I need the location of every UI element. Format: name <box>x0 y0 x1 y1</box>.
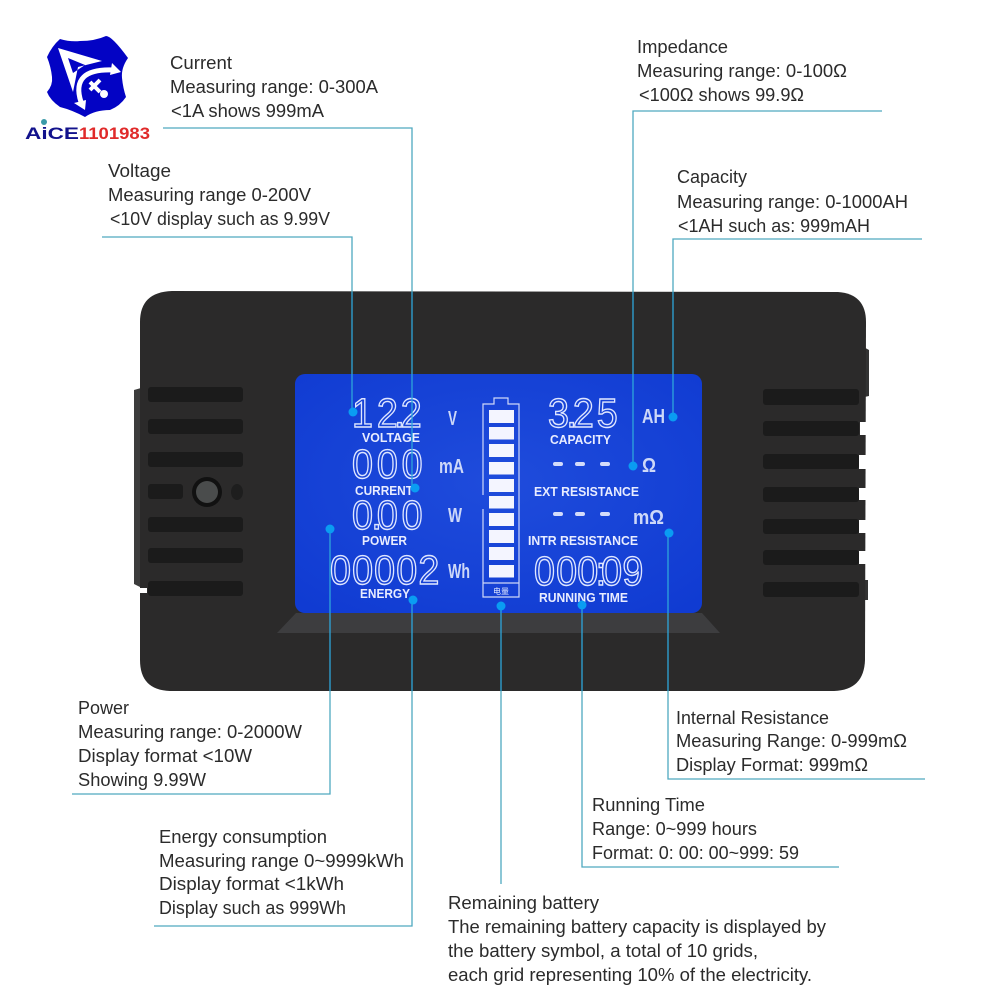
callout: power: Showing 9.99W <box>78 770 206 790</box>
current readout: 000 <box>352 442 423 487</box>
voltage readout: VOLTAGE <box>362 430 420 445</box>
energy readout: ENERGY <box>360 586 410 601</box>
callout: running time: Format: 0: 00: 00~999: 59 <box>592 843 799 863</box>
callout: capacity: Measuring range: 0-1000AH <box>677 192 908 212</box>
logo wordmark: 1101983 <box>79 124 150 143</box>
callout: power <box>72 524 334 794</box>
side clip left <box>134 388 142 588</box>
LCD screen <box>295 374 702 613</box>
callout: capacity: <1AH such as: 999mAH <box>678 216 870 236</box>
callout: internal resistance: Internal Resistance <box>676 708 829 728</box>
callout: impedance <box>628 37 882 470</box>
power readout: POWER <box>362 533 408 548</box>
voltage readout: 12.2 <box>352 391 422 436</box>
callout: internal resistance: Measuring Range: 0-999mΩ <box>676 731 907 751</box>
callout: remaining battery: The remaining battery capacity is displayed by <box>448 917 826 937</box>
callout: capacity <box>668 167 922 422</box>
callout: running time: Range: 0~999 hours <box>592 819 757 839</box>
callout: remaining battery: each grid representing 10% of the electricity. <box>448 965 812 985</box>
housing <box>140 291 866 691</box>
power readout: W <box>448 505 462 527</box>
current readout <box>352 442 464 498</box>
external resistance readout: EXT RESISTANCE <box>534 484 639 499</box>
callout: voltage: Measuring range 0-200V <box>108 185 311 205</box>
power readout: 0.00 <box>352 493 423 538</box>
callout: remaining battery: Remaining battery <box>448 893 599 913</box>
running time readout: 000:09 <box>534 549 643 594</box>
callout: capacity: Capacity <box>677 167 747 187</box>
callout: current: Current <box>170 53 232 73</box>
current readout: mA <box>439 456 464 478</box>
callout: voltage: <10V display such as 9.99V <box>110 209 330 229</box>
callout: impedance: Impedance <box>637 37 728 57</box>
left vents <box>148 387 243 596</box>
callout: energy consumption: Display such as 999Wh <box>159 898 346 918</box>
logo <box>25 36 150 143</box>
battery gauge <box>483 398 519 597</box>
energy readout <box>330 548 470 601</box>
internal resistance readout <box>528 507 664 548</box>
logo wordmark <box>25 119 150 143</box>
callout: impedance: Measuring range: 0-100Ω <box>637 61 847 81</box>
internal resistance readout: mΩ <box>633 507 664 529</box>
energy readout: 00002 <box>330 548 439 593</box>
callout: energy consumption: Display format <1kWh <box>159 874 344 894</box>
current readout: CURRENT <box>355 483 413 498</box>
power readout <box>352 493 462 548</box>
device body <box>134 291 869 691</box>
battery gauge: 电量 <box>493 586 509 596</box>
callout: internal resistance: Display Format: 999mΩ <box>676 755 868 775</box>
capacity readout: CAPACITY <box>550 432 611 447</box>
capacity readout <box>548 391 665 447</box>
callout: running time <box>578 600 839 867</box>
callout: impedance: <100Ω shows 99.9Ω <box>639 85 804 105</box>
capacity readout: 3.25 <box>548 391 618 436</box>
callout: power: Power <box>78 698 129 718</box>
callout: remaining battery: the battery symbol, a total of 10 grids, <box>448 941 758 961</box>
callout: power: Display format <10W <box>78 746 252 766</box>
callout: voltage: Voltage <box>108 161 171 181</box>
callout: running time: Running Time <box>592 795 705 815</box>
side clip right <box>860 345 869 600</box>
callout: energy consumption: Energy consumption <box>159 827 327 847</box>
callout: remaining battery <box>448 602 826 985</box>
capacity readout: AH <box>642 406 665 428</box>
internal resistance readout: INTR RESISTANCE <box>528 533 638 548</box>
icon: blue shield <box>47 36 128 117</box>
running time readout: RUNNING TIME <box>539 590 628 605</box>
button <box>192 477 243 507</box>
lower bezel <box>277 613 720 633</box>
callout: energy consumption <box>154 596 418 926</box>
callout: current: <1A shows 999mA <box>171 101 324 121</box>
logo wordmark: AiCE <box>25 124 79 143</box>
external resistance readout: Ω <box>642 455 656 477</box>
callout: current: Measuring range: 0-300A <box>170 77 378 97</box>
side notches <box>140 422 868 593</box>
external resistance readout <box>534 455 656 499</box>
callout: voltage <box>102 161 358 416</box>
right vents <box>763 389 859 597</box>
energy readout: Wh <box>448 561 470 583</box>
callout: power: Measuring range: 0-2000W <box>78 722 302 742</box>
callout: current <box>163 53 420 492</box>
callout: energy consumption: Measuring range 0~9999kWh <box>159 851 404 871</box>
voltage readout <box>352 391 457 445</box>
callout: internal resistance <box>664 528 925 779</box>
voltage readout: V <box>448 408 457 430</box>
